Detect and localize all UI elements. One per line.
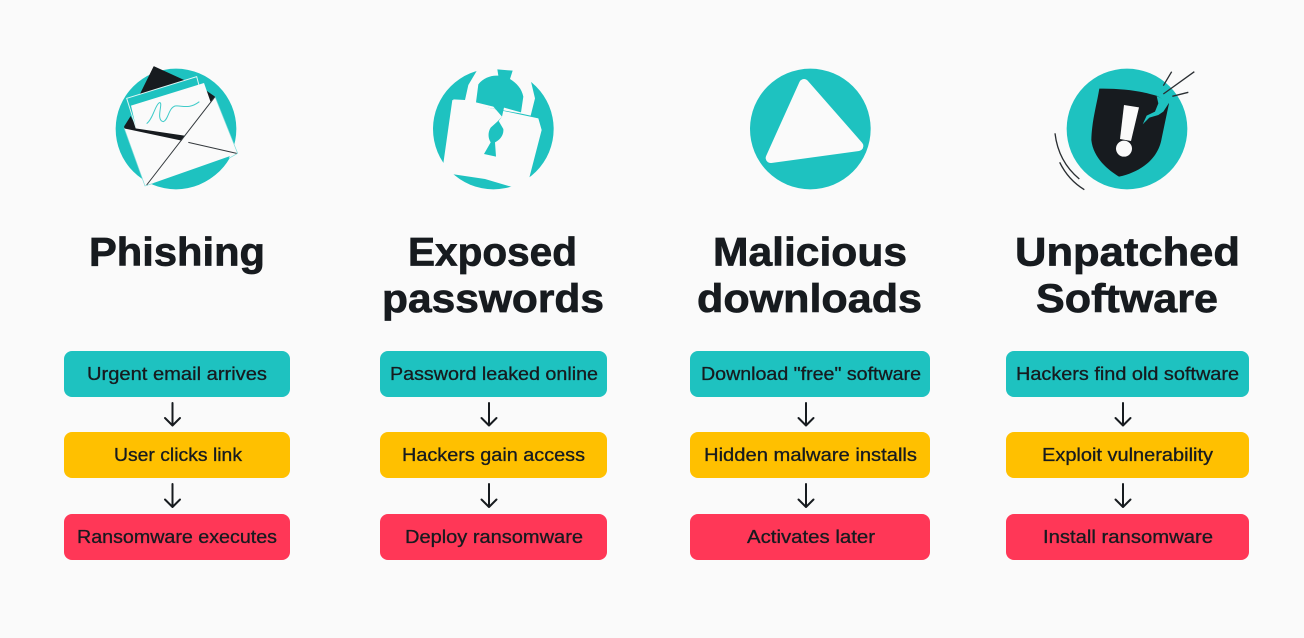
panel: phishing xyxy=(64,67,290,560)
arrow xyxy=(482,403,496,426)
arrow xyxy=(1116,403,1130,426)
icon: cracked shield xyxy=(1055,69,1194,190)
step: Hidden malware installs: Hidden malware installs xyxy=(704,445,917,465)
panel: exposed passwords xyxy=(380,62,607,560)
arrow xyxy=(798,403,814,426)
icon: triangle in circle xyxy=(750,69,871,189)
heading: Malicious downloads: Malicious xyxy=(713,230,907,274)
arrow xyxy=(1116,484,1130,507)
icon: broken padlock xyxy=(433,62,554,192)
step: Activates later xyxy=(690,514,930,560)
step: Hidden malware installs xyxy=(690,432,930,478)
heading: Exposed passwords: passwords xyxy=(382,277,604,321)
step: Hackers gain access xyxy=(380,432,607,478)
panel: malicious downloads xyxy=(690,69,930,560)
step: Ransomware executes: Ransomware executes xyxy=(77,527,277,547)
step: Hackers gain access: Hackers gain access xyxy=(402,445,585,465)
panel: unpatched software xyxy=(1006,69,1249,560)
arrow xyxy=(482,484,496,507)
heading: Malicious downloads: downloads xyxy=(697,277,922,321)
step: Install ransomware: Install ransomware xyxy=(1043,527,1213,547)
arrow xyxy=(798,484,814,507)
heading: Malicious downloads xyxy=(697,230,922,321)
heading: Unpatched Software: Software xyxy=(1036,277,1218,321)
arrow xyxy=(165,403,180,426)
step: Activates later: Activates later xyxy=(747,527,875,547)
heading: Unpatched Software xyxy=(1015,230,1240,321)
step: Hackers find old software xyxy=(1006,351,1249,397)
step: Install ransomware xyxy=(1006,514,1249,560)
heading: Phishing: Phishing xyxy=(89,230,265,274)
step: Password leaked online xyxy=(380,351,607,397)
step: Urgent email arrives: Urgent email arrives xyxy=(87,364,267,384)
step: User clicks link: User clicks link xyxy=(114,445,243,465)
arrow xyxy=(165,484,180,507)
step: User clicks link xyxy=(64,432,290,478)
step: Download "free" software xyxy=(690,351,930,397)
icon: open envelope xyxy=(116,67,238,189)
step: Deploy ransomware: Deploy ransomware xyxy=(405,527,583,547)
step: Hackers find old software: Hackers find old software xyxy=(1016,364,1239,384)
step: Download "free" software: Download "free" software xyxy=(701,364,921,384)
step: Urgent email arrives xyxy=(64,351,290,397)
step: Exploit vulnerability xyxy=(1006,432,1249,478)
step: Deploy ransomware xyxy=(380,514,607,560)
step: Password leaked online: Password leaked online xyxy=(390,364,598,384)
heading: Unpatched Software: Unpatched xyxy=(1015,230,1240,274)
heading: Exposed passwords xyxy=(382,230,604,321)
step: Ransomware executes xyxy=(64,514,290,560)
heading: Exposed passwords: Exposed xyxy=(408,230,577,274)
step: Exploit vulnerability: Exploit vulnerability xyxy=(1042,445,1213,465)
